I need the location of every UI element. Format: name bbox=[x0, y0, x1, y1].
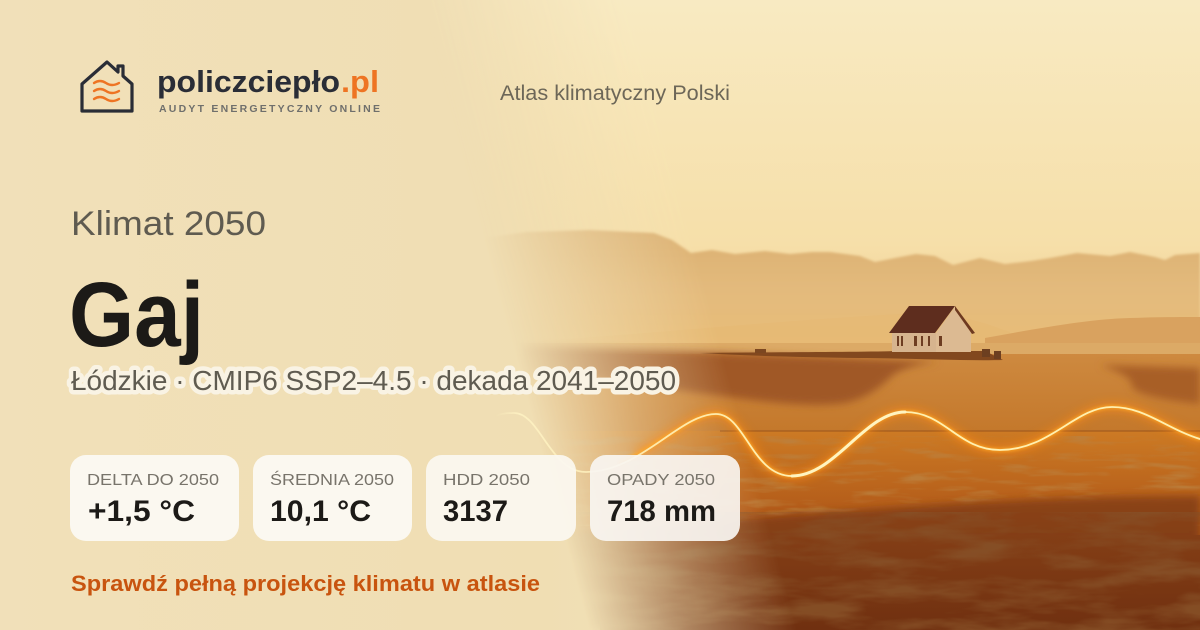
gable wall bbox=[936, 307, 971, 352]
front wall bbox=[892, 333, 937, 352]
sheds bbox=[982, 349, 1001, 359]
sky bbox=[524, 0, 1200, 317]
roof gable edge bbox=[955, 306, 975, 334]
value: 3137 bbox=[443, 495, 508, 528]
label: HDD 2050 bbox=[443, 472, 530, 489]
subtitle with halo: Łódzkie · CMIP6 SSP2–4.5 · dekada 2041–2050 bbox=[71, 365, 676, 396]
call to action: Sprawdź pełną projekcję klimatu w atlasie bbox=[71, 571, 540, 596]
title: Gaj bbox=[69, 264, 204, 366]
stat card: delta bbox=[70, 455, 239, 541]
stat card: precipitation bbox=[590, 455, 740, 541]
stat card: mean bbox=[253, 455, 412, 541]
wave bright segment bbox=[792, 412, 905, 476]
foreground mottling bbox=[654, 512, 1200, 630]
logo bbox=[82, 62, 380, 115]
value: 10,1 °C bbox=[270, 495, 371, 528]
dune shadow: centre bbox=[520, 346, 939, 405]
wheat patches bbox=[668, 436, 1200, 516]
stat card: HDD bbox=[426, 455, 576, 541]
wave halo bbox=[640, 407, 1200, 476]
wheat mid field bbox=[548, 434, 1200, 535]
wave glow bbox=[620, 407, 1200, 476]
eyebrow heading: Klimat 2050 bbox=[71, 205, 266, 243]
header label: Atlas klimatyczny Polski bbox=[500, 82, 730, 105]
logo tagline: AUDYT ENERGETYCZNY ONLINE bbox=[159, 103, 380, 115]
dune shadow: right bbox=[1100, 365, 1200, 404]
roof bbox=[889, 306, 955, 333]
wave line bbox=[495, 407, 1200, 476]
house on the hill bbox=[700, 306, 1003, 360]
icon: house with heat waves bbox=[82, 62, 132, 111]
far hill bbox=[985, 317, 1200, 343]
glowing climate wave bbox=[495, 407, 1200, 476]
mist hill bbox=[480, 314, 1010, 350]
hill under house bbox=[700, 351, 1003, 360]
horizon line bbox=[720, 430, 1200, 432]
windows bbox=[897, 336, 942, 346]
dark foreground body bbox=[600, 535, 1200, 630]
label: ŚREDNIA 2050 bbox=[270, 470, 394, 489]
landscape scene bbox=[508, 0, 1200, 630]
distant tree line bbox=[470, 230, 1200, 345]
dark foreground edge bbox=[560, 496, 1200, 630]
wordmark: policzciepło bbox=[157, 64, 340, 99]
distant bush bbox=[755, 349, 766, 352]
value: 718 mm bbox=[607, 495, 716, 528]
far plain bbox=[582, 343, 1200, 354]
value: +1,5 °C bbox=[88, 495, 195, 528]
label: DELTA DO 2050 bbox=[87, 472, 219, 489]
rolling dune bbox=[534, 354, 1200, 431]
wordmark domain: .pl bbox=[341, 64, 379, 99]
label: OPADY 2050 bbox=[607, 472, 715, 489]
